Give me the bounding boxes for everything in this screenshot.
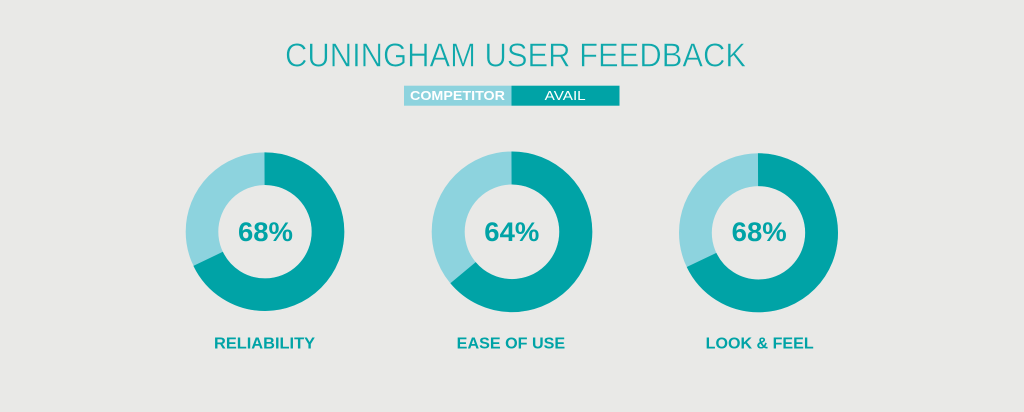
panel: reliability: [202, 169, 328, 352]
label: look and feel: LOOK & FEEL: [706, 335, 814, 352]
value: 68%: 68%: [238, 217, 293, 247]
legend: avail: [512, 86, 620, 106]
donut chart: ease of use 64%: [448, 168, 576, 296]
legend: competitor: [404, 86, 512, 106]
label: ease of use: EASE OF USE: [457, 335, 566, 352]
value: 68%: 68%: [732, 217, 787, 247]
legend: competitor: COMPETITOR: [410, 88, 506, 103]
value: 64%: 64%: [484, 217, 539, 247]
title: CUNINGHAM USER FEEDBACK: [285, 38, 746, 75]
panel: look and feel: [695, 170, 822, 352]
legend: [404, 86, 620, 106]
panel: ease of use: [448, 168, 576, 352]
donut chart: reliability 68%: [202, 169, 328, 295]
donut chart: look and feel 68%: [695, 170, 822, 296]
legend: avail: AVAIL: [545, 88, 586, 103]
label: reliability: RELIABILITY: [214, 335, 315, 352]
